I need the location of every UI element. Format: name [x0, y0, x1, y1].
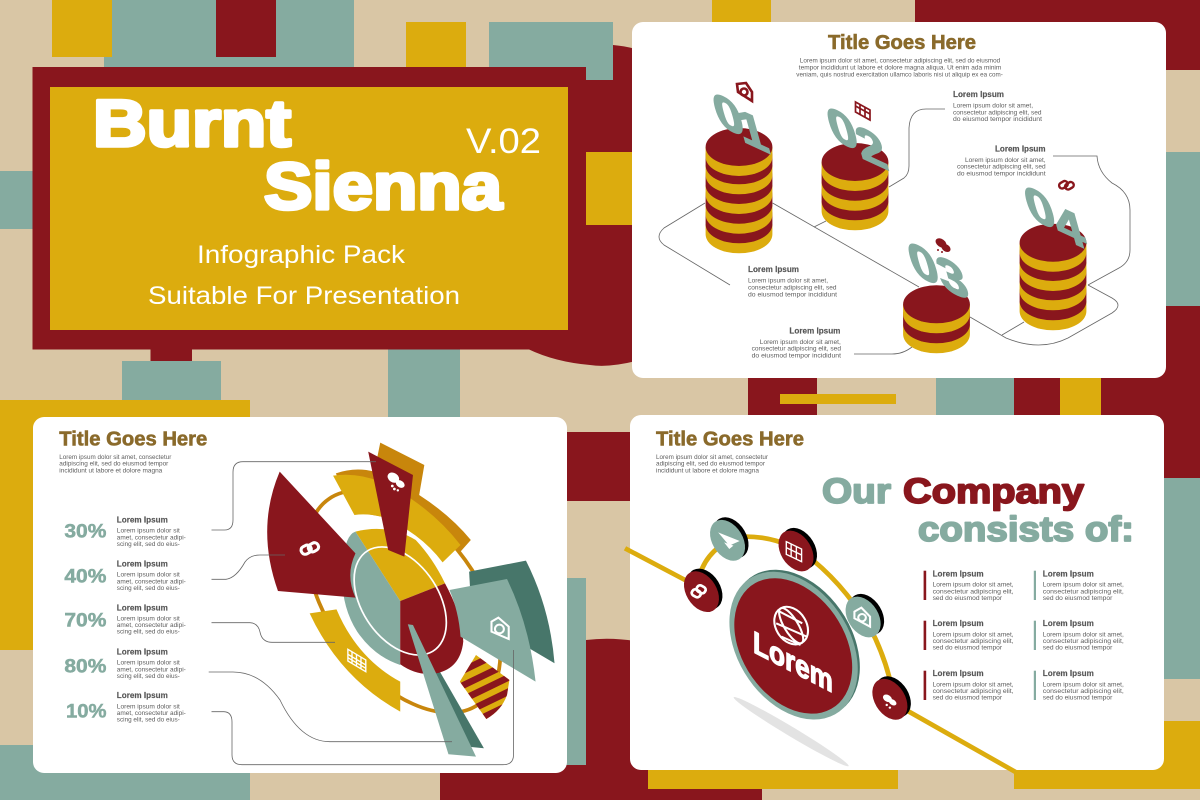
- stat 30%: [64, 516, 186, 548]
- label: middle right: Lorem Ipsum: [995, 145, 1046, 154]
- headline: consists of: consists of:: [918, 510, 1134, 549]
- list item: row 3 right: [1034, 669, 1124, 702]
- disc label: Lorem: [753, 625, 833, 700]
- stat 10%: Lorem ipsum dolor sit: [117, 703, 180, 710]
- stat 10%: amet, consectetur adipi-: [117, 710, 186, 717]
- stat 40%: scing elit, sed do eius-: [117, 585, 180, 592]
- inner white ring: [335, 531, 465, 671]
- headline: Our Company: Company: [903, 472, 1085, 511]
- icon: cloud: [934, 236, 952, 254]
- number 04: [1018, 173, 1091, 261]
- number 01: 1: [730, 96, 774, 165]
- number 03: [901, 229, 974, 312]
- stat 30%: amet, consectetur adipi-: [117, 534, 186, 541]
- number 04: 0: [1018, 173, 1062, 242]
- dark teal wedge: [469, 561, 555, 663]
- list item: row 1 left: consectetur adipiscing elit,: [933, 588, 1014, 595]
- list item: row 2 left: [924, 619, 1014, 652]
- number 02: 0: [820, 94, 864, 163]
- stat 70%: amet, consectetur adipi-: [117, 622, 186, 629]
- icon: calendar: [348, 649, 366, 672]
- node: link: [677, 563, 730, 618]
- list item: row 3 right: consectetur adipiscing elit,: [1043, 688, 1124, 695]
- list item: row 2 right: Lorem ipsum dolor sit amet,: [1043, 631, 1124, 638]
- node: cloud: [865, 670, 918, 726]
- label: lower left: do eiusmod tempor incididunt: [748, 291, 837, 298]
- wedge: gold upper arc: [333, 475, 461, 562]
- label: top right: consectetur adipiscing elit, sed: [953, 109, 1042, 116]
- label: top right: [953, 90, 1042, 123]
- hero title panel: [32, 67, 586, 350]
- stat 80%: scing elit, sed do eius-: [117, 673, 180, 680]
- list item: row 1 right: [1034, 569, 1124, 602]
- subtitle line two: Suitable For Presentation: [148, 282, 460, 310]
- stat 40%: Lorem ipsum dolor sit: [117, 572, 180, 579]
- stat 10%: Lorem Ipsum: [117, 691, 168, 700]
- central disc: [703, 548, 886, 742]
- list item: row 1 left: sed do eiusmod tempor: [933, 595, 1003, 602]
- label: lower left: Lorem Ipsum: [748, 265, 799, 274]
- wedge: red left: [267, 472, 355, 598]
- wedge: gold lower: [310, 609, 400, 712]
- intro text: veniam, quis nostrud exercitation ullamco laboris nisi ut aliquip ex ea com-: [796, 71, 1003, 78]
- panel: stacked cylinders: [632, 22, 1166, 378]
- number 02: [820, 94, 893, 182]
- list item: row 1 right: sed do eiusmod tempor: [1043, 595, 1113, 602]
- centre sector: gold: [355, 529, 445, 601]
- stat 30%: Lorem Ipsum: [117, 516, 168, 525]
- panel: company: [625, 415, 1164, 773]
- stat 70%: [64, 603, 186, 636]
- panel: exploded pie chart: [33, 417, 567, 773]
- stat 70%: scing elit, sed do eius-: [117, 629, 180, 636]
- stat 30%: 30%: [64, 521, 107, 542]
- list item: row 3 right: Lorem Ipsum: [1043, 669, 1094, 678]
- intro text: tempor incididunt ut labore et dolore magna aliqua. Ut enim ada minim: [799, 64, 1002, 71]
- icon: camera: [737, 83, 752, 101]
- list item: row 3 right: sed do eiusmod tempor: [1043, 695, 1113, 702]
- icon: globe: [767, 601, 815, 650]
- stat 30%: scing elit, sed do eius-: [117, 541, 180, 548]
- headline: Our Company: [822, 472, 1085, 511]
- isometric hub diagram: [625, 511, 1018, 773]
- node: camera: [838, 588, 891, 643]
- intro text: adipiscing elit, sed do eiusmod tempor: [59, 461, 169, 468]
- wedge: red spike: [368, 452, 413, 557]
- stat 10%: scing elit, sed do eius-: [117, 717, 180, 724]
- list item: row 1 left: Lorem ipsum dolor sit amet,: [933, 582, 1014, 589]
- label: middle right: Lorem ipsum dolor sit amet,: [965, 157, 1046, 164]
- list item: row 2 right: consectetur adipiscing elit,: [1043, 638, 1124, 645]
- list item: row 2 right: [1034, 619, 1124, 652]
- stat 40%: Lorem Ipsum: [117, 559, 168, 568]
- stat 40%: amet, consectetur adipi-: [117, 578, 186, 585]
- stat 70%: 70%: [64, 611, 107, 632]
- icon: camera: [491, 618, 509, 639]
- gold track: [625, 537, 1018, 773]
- number 01: [706, 80, 774, 165]
- label: top right: do eiusmod tempor incididunt: [953, 116, 1042, 123]
- back wedge: dark gold: [336, 443, 471, 552]
- centre sector: red: [400, 583, 463, 674]
- intro text: adipiscing elit, sed do eiusmod tempor: [656, 461, 766, 468]
- list item: row 1 left: [924, 569, 1014, 602]
- list item: row 2 left: Lorem Ipsum: [933, 619, 984, 628]
- node: graduation cap: [703, 511, 756, 567]
- intro text: incididunt ut labore et dolore magna: [656, 467, 759, 474]
- number 01: 0: [706, 80, 750, 149]
- outer ring: [268, 457, 540, 746]
- list item: row 1 right: consectetur adipiscing elit,: [1043, 588, 1124, 595]
- stat 40%: 40%: [64, 566, 107, 587]
- stat 40%: [64, 559, 186, 592]
- stat 80%: [64, 647, 186, 680]
- cylinder 01: [706, 128, 772, 253]
- list item: row 1 right: Lorem Ipsum: [1043, 569, 1094, 578]
- title: Burnt: Burnt: [93, 86, 291, 160]
- striped shield: [460, 655, 510, 719]
- heading: Title Goes Here: [656, 429, 804, 451]
- connector lines: [659, 109, 1130, 354]
- connector lines: [209, 462, 513, 765]
- list item: row 2 left: sed do eiusmod tempor: [933, 645, 1003, 652]
- number 03: 0: [901, 229, 945, 298]
- stat 70%: Lorem ipsum dolor sit: [117, 615, 180, 622]
- list item: row 3 left: Lorem ipsum dolor sit amet,: [933, 681, 1014, 688]
- intro text: Lorem ipsum dolor sit amet, consectetur: [656, 454, 769, 461]
- list item: row 2 right: Lorem Ipsum: [1043, 619, 1094, 628]
- centre sector: teal: [342, 532, 400, 665]
- floor shadow: [731, 693, 851, 770]
- intro text: incididunt ut labore et dolore magna: [59, 467, 163, 474]
- label: middle right: do eiusmod tempor incididunt: [957, 170, 1046, 177]
- stat 10%: [66, 691, 186, 724]
- icon: cloud: [385, 470, 406, 491]
- label: bottom: do eiusmod tempor incididunt: [752, 352, 841, 359]
- label: bottom: consectetur adipiscing elit, sed: [752, 346, 841, 353]
- list item: row 3 left: Lorem Ipsum: [933, 669, 984, 678]
- intro text: [656, 454, 769, 474]
- list item: row 2 left: Lorem ipsum dolor sit amet,: [933, 631, 1014, 638]
- list item: row 1 left: Lorem Ipsum: [933, 569, 984, 578]
- dark teal sliver: [433, 672, 484, 748]
- subtitle line one: Infographic Pack: [197, 241, 406, 269]
- label: lower left: [748, 265, 837, 298]
- label: lower left: Lorem ipsum dolor sit amet,: [748, 277, 828, 284]
- stat 10%: 10%: [66, 702, 107, 723]
- list item: row 3 left: sed do eiusmod tempor: [933, 695, 1003, 702]
- stat 30%: Lorem ipsum dolor sit: [117, 528, 180, 535]
- node: calendar: [771, 522, 824, 577]
- stat 80%: 80%: [64, 656, 107, 677]
- label: middle right: consectetur adipiscing elit, sed: [957, 164, 1046, 171]
- icon: calendar: [856, 102, 870, 120]
- label: bottom: Lorem ipsum dolor sit amet,: [760, 339, 841, 346]
- heading: Title Goes Here: [828, 32, 976, 54]
- stat 80%: Lorem ipsum dolor sit: [117, 660, 180, 667]
- intro text: [796, 57, 1003, 78]
- intro text: Lorem ipsum dolor sit amet, consectetur adipiscing elit, sed do eiusmod: [800, 57, 1001, 64]
- label: bottom: Lorem Ipsum: [789, 327, 840, 336]
- intro text: [59, 454, 172, 474]
- number 02: 2: [849, 113, 893, 182]
- icon: link: [300, 541, 320, 556]
- label: top right: Lorem ipsum dolor sit amet,: [953, 103, 1033, 110]
- label: bottom: [752, 327, 841, 359]
- label: top right: Lorem Ipsum: [953, 90, 1004, 99]
- cylinder 04: [1020, 224, 1086, 330]
- number 04: 4: [1047, 192, 1091, 261]
- exploded pie chart: [267, 443, 555, 757]
- number 03: 3: [930, 243, 974, 312]
- list item: row 3 right: Lorem ipsum dolor sit amet,: [1043, 681, 1124, 688]
- stat 70%: Lorem Ipsum: [117, 603, 168, 612]
- version label: V.02: [466, 122, 541, 161]
- title: Sienna: Sienna: [264, 149, 503, 223]
- cylinder 02: [822, 143, 888, 230]
- list item: row 3 left: consectetur adipiscing elit,: [933, 688, 1014, 695]
- cylinder 03: [903, 285, 970, 353]
- stat 80%: amet, consectetur adipi-: [117, 666, 186, 673]
- list item: row 2 right: sed do eiusmod tempor: [1043, 645, 1113, 652]
- list item: row 2 left: consectetur adipiscing elit,: [933, 638, 1014, 645]
- stat 80%: Lorem Ipsum: [117, 647, 168, 656]
- wedge: teal spike: [408, 624, 476, 757]
- label: middle right: [957, 145, 1046, 177]
- list item: row 3 left: [924, 669, 1014, 702]
- heading: Title Goes Here: [59, 429, 207, 451]
- headline: Our Company: Our: [822, 472, 891, 511]
- wedge: teal right: [449, 579, 536, 682]
- icon: link: [1058, 180, 1075, 191]
- label: lower left: consectetur adipiscing elit, sed: [748, 284, 837, 291]
- intro text: Lorem ipsum dolor sit amet, consectetur: [59, 454, 172, 461]
- list item: row 1 right: Lorem ipsum dolor sit amet,: [1043, 582, 1124, 589]
